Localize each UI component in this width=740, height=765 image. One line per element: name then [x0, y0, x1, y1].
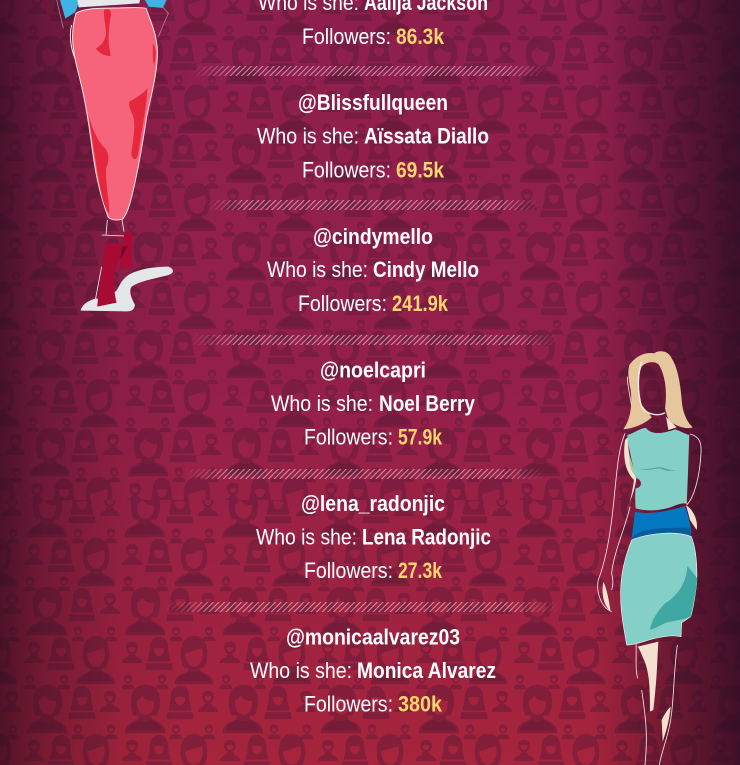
entry: lena_radonjic: [256, 491, 491, 583]
shoe shadow: [81, 267, 173, 311]
illustration: woman in teal dress: [598, 351, 701, 765]
entry: cindymello: [267, 224, 479, 316]
entry: Blissfullqueen: Followers:: [302, 158, 391, 183]
skin: [624, 417, 697, 742]
entry: Blissfullqueen: @Blissfullqueen: [298, 90, 448, 115]
hand: [603, 582, 611, 612]
entry: monicaalvarez03: @monicaalvarez03: [286, 625, 460, 650]
arm and body outlines: [598, 377, 701, 765]
entry: Aalija Jackson: 86.3k: [396, 24, 445, 49]
skirt: [73, 7, 157, 220]
cardigan and top: [60, 0, 167, 19]
entry: Aalija Jackson: [258, 0, 488, 49]
entry: monicaalvarez03: 380k: [398, 692, 443, 717]
entry: noelcapri: Followers:: [304, 425, 393, 450]
entry: noelcapri: Noel Berry: [379, 391, 476, 416]
entry: Blissfullqueen: 69.5k: [396, 158, 445, 183]
entry: cindymello: Cindy Mello: [373, 257, 479, 282]
entry: lena_radonjic: @lena_radonjic: [301, 491, 445, 516]
entry: cindymello: Who is she:: [267, 257, 368, 282]
skirt shadows: [89, 9, 156, 213]
illustration: woman in pink skirt: [57, 0, 173, 311]
entry: lena_radonjic: Followers:: [304, 558, 393, 583]
shoes: [97, 232, 132, 307]
entry: noelcapri: @noelcapri: [320, 358, 426, 383]
entry: cindymello: @cindymello: [313, 224, 433, 249]
entry: lena_radonjic: Who is she:: [256, 525, 357, 550]
entry: noelcapri: Who is she:: [271, 391, 373, 416]
entry: lena_radonjic: 27.3k: [398, 558, 443, 583]
entry: noelcapri: [271, 358, 476, 450]
entry: cindymello: Followers:: [298, 291, 387, 316]
entry: monicaalvarez03: Followers:: [304, 692, 393, 717]
entry: Blissfullqueen: [257, 90, 489, 183]
entry: Aalija Jackson: Followers:: [302, 24, 391, 49]
entry: cindymello: 241.9k: [392, 291, 449, 316]
entry: noelcapri: 57.9k: [398, 425, 443, 450]
entry: lena_radonjic: Lena Radonjic: [362, 525, 491, 550]
hair: [623, 351, 693, 429]
dress: [621, 428, 697, 645]
entry: monicaalvarez03: Monica Alvarez: [357, 658, 496, 683]
entry: Blissfullqueen: Aïssata Diallo: [364, 124, 489, 149]
legs: [95, 220, 125, 302]
entry: Blissfullqueen: Who is she:: [257, 124, 359, 149]
entry: monicaalvarez03: [250, 625, 496, 717]
entry: monicaalvarez03: Who is she:: [250, 658, 352, 683]
dividers: [165, 66, 560, 612]
